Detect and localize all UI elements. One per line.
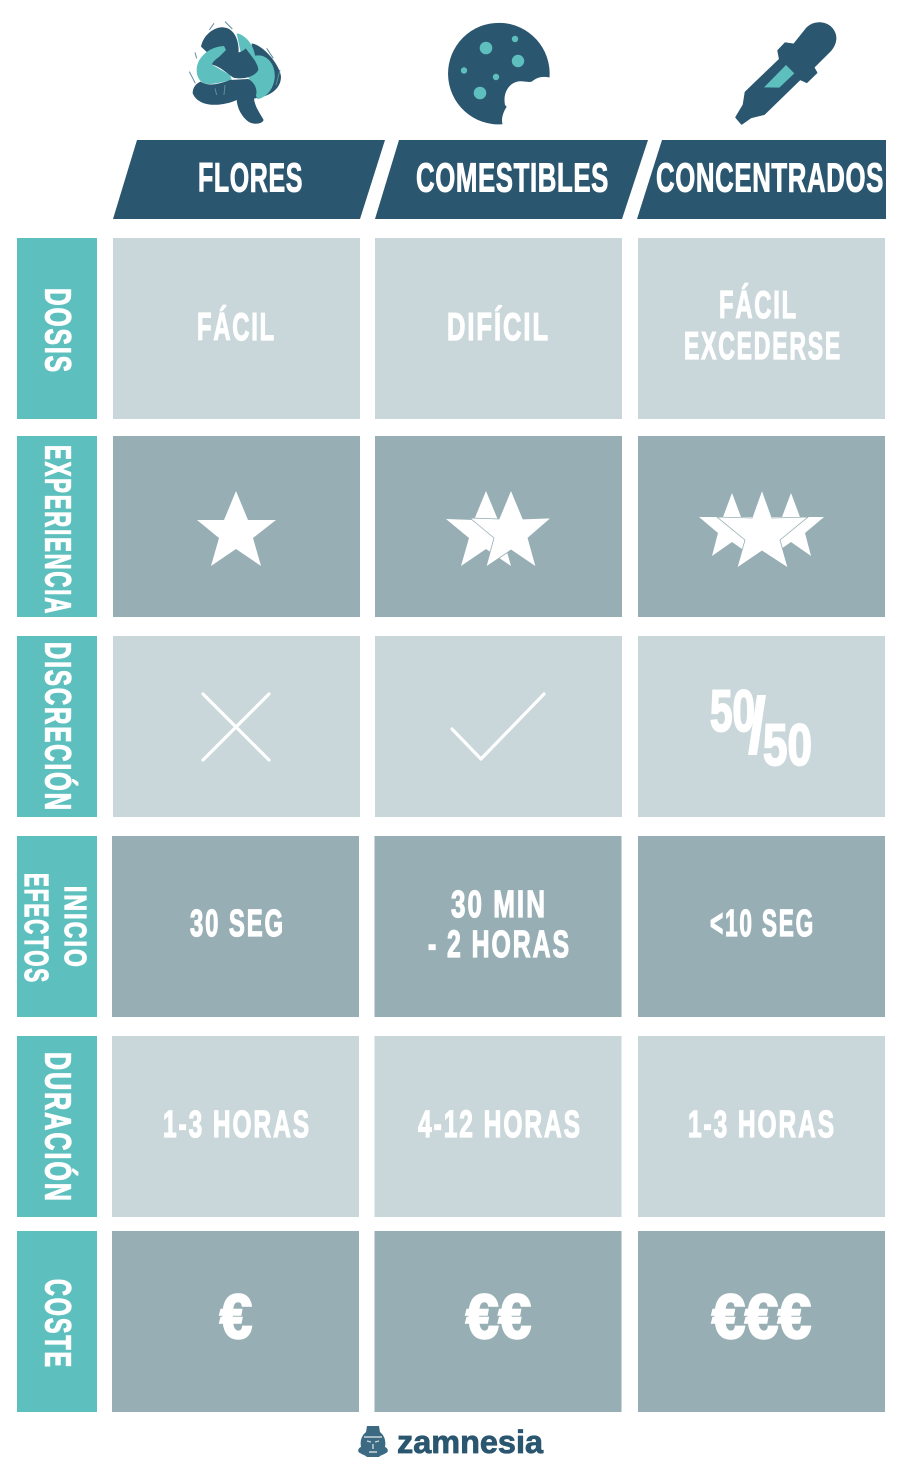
icon: dropper [736,23,835,124]
icon: bitten cookie [448,23,550,124]
cell: concentrados discreción, 50/50: 50 [763,713,812,778]
cell: comestibles inicio efectos [374,836,622,1017]
cell: concentrados experiencia, three stars [638,436,885,617]
cell: flores experiencia, one star [113,436,360,617]
row label: dosis [17,238,97,419]
row label: inicio efectos: INICIO [58,886,93,969]
header: comestibles [375,140,648,219]
cell: concentrados duración [638,1036,885,1217]
header: concentrados [637,140,886,219]
header: flores: FLORES [198,154,303,200]
cell: flores discreción, cross [113,636,360,817]
icon: cotton flower [189,22,281,124]
row label: dosis: DOSIS [38,288,78,374]
cell: comestibles duración [374,1036,622,1217]
row label: duración [17,1036,97,1217]
row label: coste [17,1231,97,1412]
cell: flores inicio efectos [112,836,359,1017]
cell: comestibles coste: €€ [466,1283,531,1352]
cell: concentrados inicio efectos [638,836,885,1017]
cell: concentrados discreción, 50/50: 50 [710,679,755,744]
cell: comestibles experiencia, two stars [375,436,622,617]
cell: concentrados dosis: FÁCIL [719,283,798,327]
row label: duración: DURACIÓN [38,1052,80,1203]
cell: concentrados dosis [638,238,885,419]
cell: comestibles discreción, check mark [375,636,622,817]
cell: flores coste [112,1231,359,1412]
logo: zamnesia: zamnesia [397,1424,543,1460]
cell: concentrados discreción, 50/50 [638,636,885,817]
cell: flores inicio efectos: 30 SEG [190,903,285,945]
cell: flores duración [112,1036,359,1217]
row label: experiencia [17,436,97,617]
cell: concentrados inicio efectos: <10 SEG [710,903,815,945]
row label: discreción: DISCRECIÓN [38,642,80,812]
row label: discreción [17,636,97,817]
cell: flores coste: € [220,1283,252,1352]
cell: comestibles dosis: DIFÍCIL [447,305,550,349]
row label: experiencia: EXPERIENCIA [38,445,78,615]
cell: concentrados coste [638,1231,885,1412]
row label: inicio efectos: EFECTOS [18,873,55,984]
row label: coste: COSTE [38,1279,78,1369]
cell: comestibles inicio efectos: - 2 HORAS [428,924,571,966]
cell: comestibles coste [374,1231,622,1412]
cell: comestibles inicio efectos: 30 MIN [451,884,547,926]
cell: concentrados coste: €€€ [712,1283,811,1352]
header: flores [113,140,385,219]
cell: flores duración: 1-3 HORAS [163,1104,311,1146]
cell: flores dosis: FÁCIL [197,305,276,349]
cell: flores dosis [113,238,360,419]
cell: comestibles duración: 4-12 HORAS [418,1104,582,1146]
cell: comestibles dosis [375,238,622,419]
row label: inicio efectos [17,836,97,1017]
header: comestibles: COMESTIBLES [416,154,609,200]
